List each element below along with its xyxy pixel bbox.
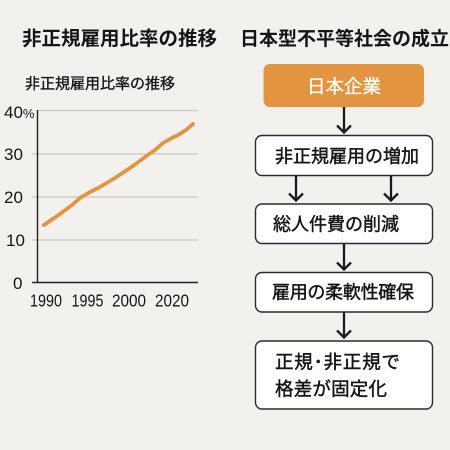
flow box: 正規・非正規で格差が固定化: 格差が固定化 <box>275 378 387 400</box>
flow box: 総人件費の削減 <box>256 204 432 244</box>
flow box: 正規・非正規で格差が固定化 <box>256 341 432 409</box>
chart title: 非正規雇用比率の推移 <box>25 76 175 92</box>
right title: 日本型不平等社会の成立 <box>240 27 449 50</box>
flow box: 非正規雇用の増加: 非正規雇用の増加 <box>275 146 419 166</box>
y axis labels: 0 <box>13 274 22 293</box>
flow box: 雇用の柔軟性確保: 雇用の柔軟性確保 <box>272 282 414 302</box>
y axis labels: 30 <box>4 145 23 164</box>
x axis labels: 1990 <box>30 290 62 310</box>
flow box: 正規・非正規で格差が固定化: 正規･非正規で <box>275 352 400 372</box>
left title: 非正規雇用比率の推移 <box>22 28 217 50</box>
line chart <box>4 76 198 310</box>
x axis labels <box>30 290 189 310</box>
flow box: 雇用の柔軟性確保 <box>256 272 432 312</box>
flow box: 日本企業: 日本企業 <box>307 76 381 97</box>
arrow <box>337 244 351 270</box>
x axis labels: 2020 <box>155 290 189 310</box>
data line <box>44 124 193 225</box>
flow box: 非正規雇用の増加 <box>256 136 432 176</box>
y axis labels: 20 <box>4 188 23 207</box>
x axis labels: 2000 <box>112 290 146 310</box>
arrow <box>337 107 351 133</box>
flow box: 日本企業 <box>264 64 424 107</box>
arrow right <box>384 176 398 201</box>
arrow <box>337 312 351 338</box>
flow box: 総人件費の削減: 総人件費の削減 <box>273 214 399 234</box>
x axis labels: 1995 <box>72 290 104 310</box>
y axis labels: 40% <box>4 103 35 122</box>
arrow left <box>289 176 303 201</box>
y axis labels: 10 <box>6 231 25 250</box>
y axis labels <box>4 103 35 293</box>
